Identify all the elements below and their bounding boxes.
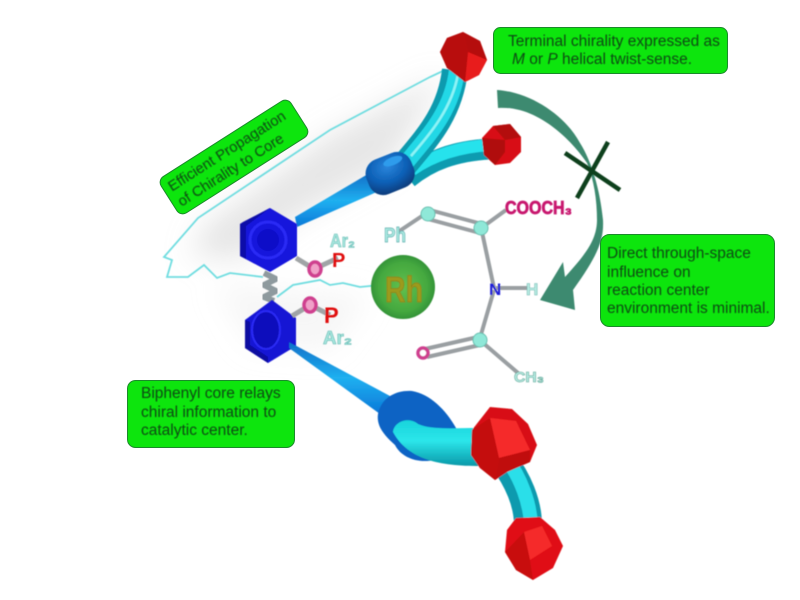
rhodium sphere: Rh [385, 269, 423, 310]
red ball: large [471, 407, 537, 480]
tube: upper right branch [408, 145, 490, 178]
label: H: H [526, 280, 538, 299]
upper benzene ring [240, 208, 297, 272]
callout: biphenyl core: Biphenyl core relays [141, 385, 281, 402]
red ball: bottom [505, 517, 563, 580]
lower Ar2 label: Ar₂ [323, 328, 352, 348]
callout: efficient propagation [158, 97, 310, 217]
callout: terminal chirality: M or P helical twist-sense. [512, 51, 692, 68]
substrate molecule [384, 198, 572, 386]
tube: lowest cyan [503, 458, 531, 525]
lower benzene ring [245, 300, 296, 363]
phosphite ligands [292, 231, 355, 348]
lower blue cone [289, 342, 390, 414]
callout: direct through-space influence [600, 234, 774, 326]
curved arrow: blocked pathway [497, 90, 603, 310]
callout: biphenyl core: catalytic center. [141, 422, 248, 439]
upper tube assembly [295, 32, 521, 227]
lower blue blob [378, 391, 462, 461]
cross mark [565, 142, 620, 198]
upper Ar2 label: Ar₂ [330, 231, 355, 251]
blue junction node [361, 147, 419, 200]
label: CH3: CH₃ [514, 369, 544, 386]
tube: upper left branch [402, 70, 458, 168]
callout: direct through-space influence: reaction center [607, 282, 710, 299]
background shadow [190, 75, 445, 350]
label: COOCH3: COOCH₃ [505, 198, 572, 218]
tube: lower cyan [393, 420, 480, 466]
callout: biphenyl core: chiral information to [141, 404, 276, 421]
lower P label: P [324, 303, 339, 328]
red ball: top [440, 32, 487, 82]
lower O atom [304, 298, 316, 312]
rhodium sphere [371, 255, 435, 319]
callout: biphenyl core [128, 380, 294, 448]
callout: direct through-space influence: influence on [607, 264, 691, 281]
upper blue cone [295, 174, 379, 227]
callout: terminal chirality [494, 28, 728, 74]
atom nodes [421, 207, 488, 347]
callout: direct through-space influence: environment is minimal. [607, 300, 770, 317]
callout: efficient propagation: Efficient Propagation [166, 108, 289, 195]
callout: terminal chirality: Terminal chirality expressed as [508, 33, 720, 50]
upper O atom [309, 262, 321, 276]
biaryl helical bond [264, 273, 276, 301]
red ball: second [482, 124, 521, 165]
label: Ph: Ph [384, 225, 406, 247]
cyan chirality trace [164, 70, 445, 297]
atom O [418, 348, 428, 358]
callout: direct through-space influence: Direct through-space [607, 245, 751, 262]
upper P label: P [332, 250, 345, 272]
label: N: N [489, 280, 501, 299]
callout: efficient propagation: of Chirality to Core [175, 131, 287, 210]
bonds [398, 209, 527, 373]
lower tube assembly [289, 342, 563, 580]
